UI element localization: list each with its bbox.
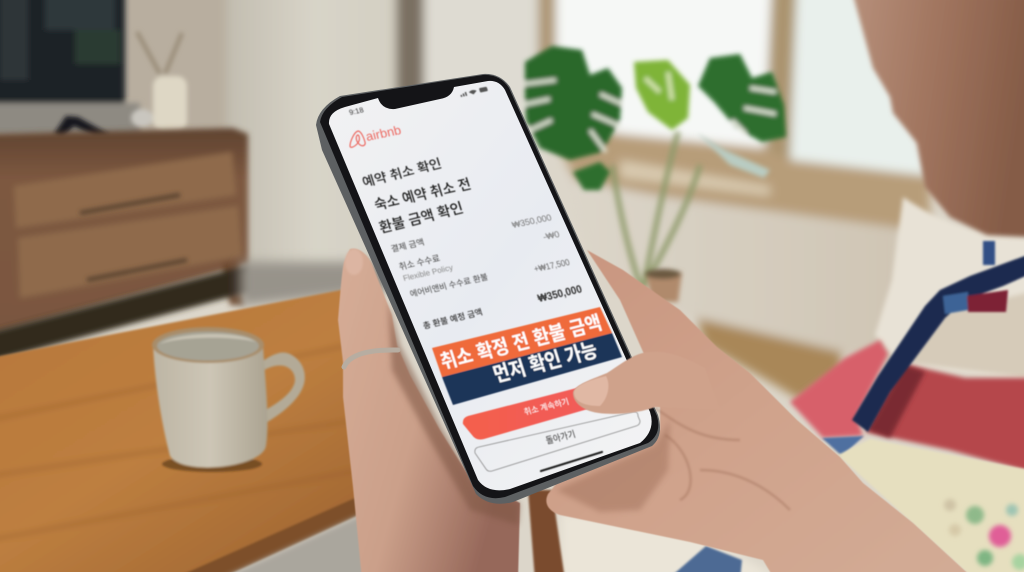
ring — [344, 350, 398, 367]
navy banner: 먼저 확인 가능 — [491, 339, 600, 387]
small dark leaf — [573, 162, 610, 190]
monstera leaf left — [522, 46, 622, 160]
fee amount: +₩17,500 — [533, 257, 571, 274]
nail — [345, 249, 363, 275]
label: flexible policy: Flexible Policy — [402, 263, 454, 283]
amount paid: ₩350,000 — [511, 212, 553, 230]
label: total refund: 총 환불 예정 금액 — [422, 307, 484, 331]
left hand shadow by phone — [388, 300, 520, 525]
palm crease shadows — [655, 408, 790, 510]
red continue button: 취소 계속하기 — [523, 396, 570, 417]
monstera plant — [522, 46, 786, 302]
red skirt — [866, 362, 1024, 472]
left hand — [338, 249, 520, 572]
plant pot — [645, 269, 682, 302]
orange banner: 취소 확정 전 환불 금액 — [438, 311, 605, 374]
floral blanket — [667, 436, 1024, 572]
phone metal edge — [316, 74, 660, 504]
pink skirt side — [790, 340, 888, 438]
person's head — [853, 0, 1024, 237]
right thumb — [573, 352, 720, 414]
vase with dried stems — [131, 32, 187, 131]
discount: -₩0 — [542, 229, 561, 242]
plant stems — [612, 132, 700, 290]
rug under table — [218, 514, 380, 572]
wooden table — [0, 289, 366, 572]
screen content — [348, 87, 640, 471]
pale leaf — [697, 133, 770, 178]
phone bezel — [320, 75, 658, 498]
thumb nail — [574, 376, 608, 406]
airbnb logo icon — [350, 131, 365, 147]
back button — [475, 412, 640, 471]
wooden cabinet — [0, 128, 248, 335]
label: paid amount: 결제 금액 — [390, 237, 426, 254]
status bar time: 9:18 — [348, 105, 365, 117]
phone screen — [329, 81, 652, 490]
airbnb wordmark: airbnb — [364, 123, 403, 144]
right hand palm behind phone — [546, 250, 975, 572]
phone — [316, 74, 660, 504]
palm shadow under phone — [556, 420, 670, 512]
light green leaf — [634, 60, 690, 130]
floor shadow under cabinet — [0, 262, 402, 362]
home indicator — [541, 452, 602, 471]
television and stand — [0, 0, 140, 138]
main title line one: 숙소 예약 취소 전 — [372, 176, 473, 214]
dark red fold beside strip — [868, 365, 925, 438]
lower bodice — [903, 292, 1024, 378]
label: fee refund: 에어비앤비 수수료 환불 — [409, 272, 489, 299]
hanbok cushion — [790, 197, 1024, 472]
coffee mug — [152, 327, 305, 472]
navy banner — [442, 333, 622, 405]
status icons — [460, 87, 488, 97]
red continue button — [463, 383, 612, 440]
label: cancel fee: 취소 수수료 — [398, 253, 441, 272]
back button: 돌아가기 — [545, 429, 577, 447]
right monstera leaf — [698, 54, 786, 142]
heading: cancel confirm: 예약 취소 확인 — [360, 156, 443, 190]
total amount: ₩350,000 — [536, 284, 584, 305]
main title line two: 환불 금액 확인 — [377, 200, 466, 237]
wooden table leg behind phone — [528, 490, 565, 572]
navy strip — [852, 241, 1024, 432]
cushion pale top — [875, 197, 1024, 380]
